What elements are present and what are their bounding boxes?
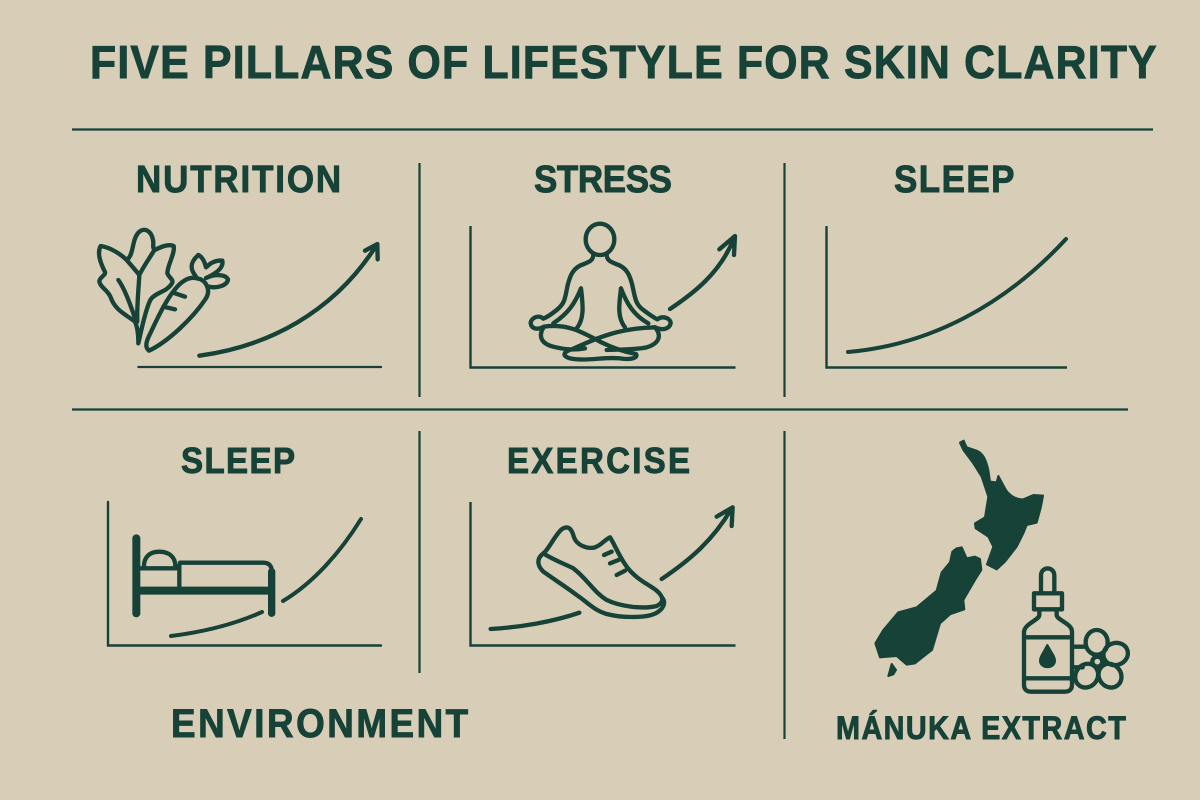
heading: exercise: EXERCISE xyxy=(507,442,690,481)
title: FIVE PILLARS OF LIFESTYLE FOR SKIN CLARITY xyxy=(90,38,1157,88)
chart: sleep axes and curve xyxy=(108,502,381,646)
chart: exercise axes and arrow xyxy=(470,502,736,646)
icon: manuka flower xyxy=(1071,630,1131,692)
heading: sleep: SLEEP xyxy=(894,158,1015,200)
map: new zealand xyxy=(875,441,1043,676)
label: manuka extract: MÁNUKA EXTRACT xyxy=(836,710,1126,746)
icon: dropper bottle xyxy=(1024,568,1072,692)
heading: stress: STRESS xyxy=(534,158,672,200)
panel: exercise xyxy=(470,442,736,646)
icon: leafy greens and carrot xyxy=(99,230,228,351)
heading: environment: ENVIRONMENT xyxy=(171,702,469,746)
panel: nutrition xyxy=(99,158,381,367)
icon: running shoe xyxy=(538,527,664,617)
heading: nutrition: NUTRITION xyxy=(136,158,341,200)
panel: stress xyxy=(470,158,736,368)
chart: nutrition growth curve xyxy=(138,244,381,367)
panel: sleep bed xyxy=(108,442,381,646)
heading: sleep: SLEEP xyxy=(181,442,295,481)
icon: meditating person xyxy=(531,224,671,360)
icon: bed xyxy=(136,538,272,613)
chart: stress axes and arrow xyxy=(470,226,736,368)
chart: sleep growth curve xyxy=(826,226,1067,368)
panel: manuka xyxy=(836,441,1131,746)
panel: sleep chart xyxy=(826,158,1067,368)
